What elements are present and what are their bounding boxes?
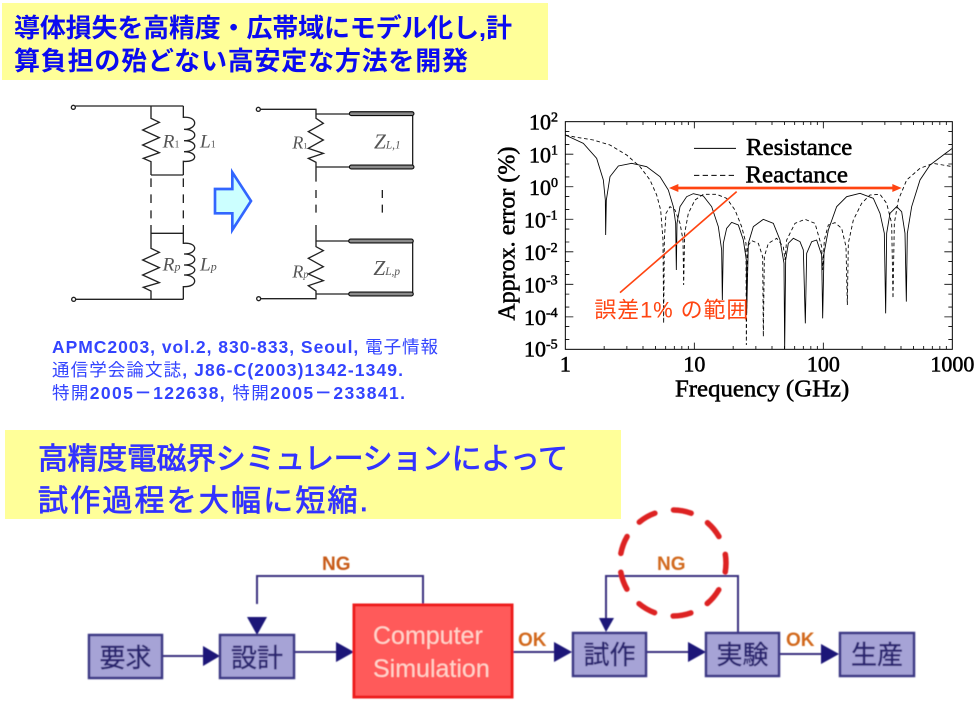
legend: Resistance	[746, 135, 852, 161]
arrow: 1% error range	[669, 184, 902, 192]
y axis tick labels: 0	[551, 176, 558, 191]
line: resistance (solid)	[565, 135, 952, 349]
y axis tick labels: 10	[529, 109, 551, 134]
box: 実験: 実験	[716, 640, 769, 670]
connectors	[162, 576, 823, 656]
callout: dashed circle	[620, 510, 726, 616]
labels: NG and OK: OK	[518, 630, 547, 651]
circuit: RL ladder	[71, 105, 217, 301]
circuit: transmission line model	[256, 107, 413, 301]
y axis tick labels: -3	[546, 274, 558, 289]
panel: top heading: 算負担の殆どない高安定な方法を開発	[14, 46, 468, 76]
box: 要求: 要求	[99, 643, 152, 673]
leader line	[620, 192, 737, 293]
y axis tick labels: 1	[551, 143, 558, 158]
flow diagram: development process	[89, 510, 914, 697]
circuit: RL ladder: L1	[199, 131, 216, 152]
circuit: transmission line model: Rp	[291, 261, 308, 281]
panel: second heading: 高精度電磁界シミュレーションによって	[38, 443, 568, 476]
legend: Reactance	[745, 162, 848, 188]
citation text block: 特開2005－122638, 特開2005－233841.	[52, 383, 405, 403]
y axis tick labels: -2	[546, 241, 558, 256]
box: 生産: 生産	[851, 640, 903, 670]
circuit diagram: RL ladder to transmission line model	[71, 105, 413, 301]
panel: top heading	[2, 3, 548, 80]
circuit: transmission line model: R1	[291, 133, 308, 153]
box: 生産	[840, 633, 914, 676]
box: 実験	[706, 633, 779, 676]
circuit: RL ladder: R1	[162, 131, 179, 152]
labels: NG and OK: OK	[786, 630, 815, 651]
annotation: 1% error range: 誤差1% の範囲	[594, 297, 748, 322]
box: 要求	[89, 635, 162, 678]
y axis tick labels	[524, 109, 558, 362]
y axis tick labels: -5	[546, 338, 558, 353]
panel: second heading: 試作過程を大幅に短縮.	[38, 485, 368, 518]
box: 試作: 試作	[583, 640, 636, 670]
y axis tick labels: -4	[546, 306, 558, 321]
labels: NG and OK: NG	[322, 554, 350, 575]
arrowheads	[203, 617, 839, 666]
panel: second heading	[5, 430, 621, 519]
citation text block: 通信学会論文誌, J86-C(2003)1342-1349.	[52, 360, 403, 380]
y axis tick labels: -1	[546, 208, 558, 223]
box: 試作	[573, 633, 646, 676]
x axis tick labels: 1	[560, 352, 571, 377]
citation text block	[52, 337, 438, 403]
legend	[694, 135, 852, 188]
arrow: transformation	[215, 172, 251, 230]
line: reactance (dashed)	[565, 135, 952, 345]
citation text block: APMC2003, vol.2, 830-833, Seoul, 電子情報	[52, 337, 438, 357]
chart: approximation error vs frequency	[494, 109, 974, 403]
x axis tick labels	[560, 352, 974, 377]
y axis tick labels: 2	[551, 110, 558, 125]
y axis tick labels: 10	[524, 207, 546, 232]
y axis tick labels: 10	[529, 175, 551, 200]
circuit: transmission line model: ZL,p	[373, 256, 400, 280]
y axis tick labels: 10	[524, 273, 546, 298]
y axis tick labels: 10	[529, 142, 551, 167]
box: Computer Simulation: Computer	[373, 622, 483, 650]
box: 設計	[220, 635, 294, 678]
circuit: transmission line model: ZL,1	[374, 129, 401, 153]
x axis tick labels: 1000	[930, 352, 974, 377]
box: Computer Simulation: Simulation	[373, 655, 490, 683]
y axis tick labels: 10	[524, 240, 546, 265]
labels: NG and OK	[322, 554, 815, 651]
y axis title: Approx. error (%)	[494, 147, 521, 321]
box: Computer Simulation	[354, 605, 512, 697]
box: 設計: 設計	[231, 643, 283, 673]
panel: top heading: 導体損失を高精度・広帯域にモデル化し,計	[14, 13, 512, 43]
y axis tick labels: 10	[524, 305, 546, 330]
chart frame and ticks	[565, 122, 952, 349]
circuit: RL ladder: Rp	[162, 255, 180, 276]
x axis tick labels: 100	[807, 352, 840, 377]
y axis tick labels: 10	[524, 337, 546, 362]
x axis title: Frequency (GHz)	[675, 376, 849, 403]
circuit: RL ladder: Lp	[199, 255, 217, 276]
labels: NG and OK: NG	[657, 554, 686, 575]
x axis tick labels: 10	[683, 352, 705, 377]
